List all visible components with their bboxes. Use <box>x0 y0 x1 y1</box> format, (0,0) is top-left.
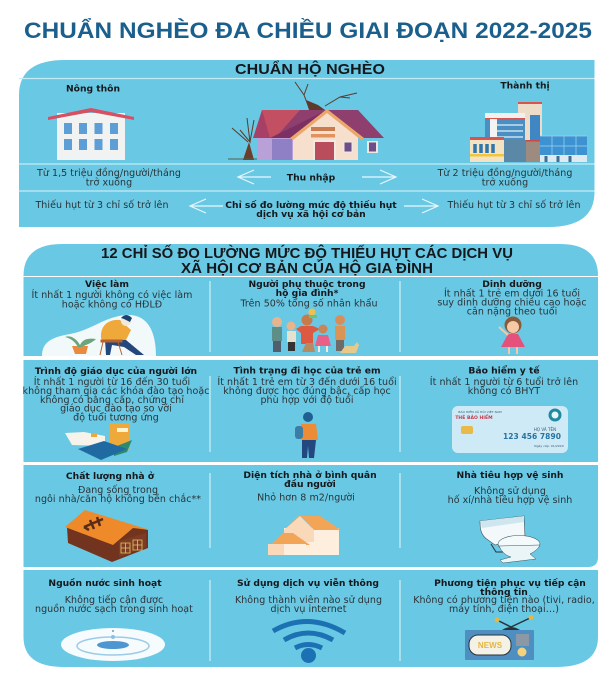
rural heading: Nông thôn <box>66 84 120 94</box>
indicator: child schooling: không được học đúng bậc, cấp học <box>223 386 391 397</box>
indicator: adult education: không có bằng cấp, chứng chỉ <box>40 395 184 406</box>
indicator: dependants: Trên 50% tổng số nhân khẩu <box>239 298 378 310</box>
icon: books and cap <box>65 423 132 460</box>
indicator: water source: Nguồn nước sinh hoạt <box>48 578 162 589</box>
indicator: information access: Không có phương tiện nào (tivi, radio, <box>413 595 595 606</box>
deprivation row: Thiếu hụt từ 3 chỉ số trở lên <box>446 200 581 211</box>
indicator: housing area: Nhỏ hơn 8 m2/người <box>257 492 355 504</box>
indicator: housing quality: Đang sống trong <box>78 485 158 496</box>
income row: trở xuống <box>86 178 132 188</box>
indicator: housing quality: Chất lượng nhà ở <box>66 471 155 482</box>
deprivation row: Chỉ số đo lường mức độ thiếu hụt <box>225 200 397 211</box>
income row <box>36 168 572 188</box>
income row: Từ 1,5 triệu đồng/người/tháng <box>36 168 181 179</box>
arrow: deprivation left <box>190 199 223 213</box>
panel heading: CHUẨN HỘ NGHÈO <box>235 60 385 78</box>
arrow: income right <box>362 170 396 184</box>
deprivation row: Thiếu hụt từ 3 chỉ số trở lên <box>34 200 169 211</box>
indicator: employment <box>32 279 192 356</box>
indicator: employment: Việc làm <box>85 279 129 290</box>
panel: row 1 <box>24 277 598 356</box>
indicator: sanitation: Nhà tiêu hợp vệ sinh <box>457 470 563 481</box>
panel: row 4 <box>24 570 598 667</box>
indicator: dependants: Người phụ thuộc trong <box>248 279 366 290</box>
indicator: telecom <box>235 578 382 663</box>
indicator: health insurance <box>430 364 578 453</box>
indicator: child schooling: Ít nhất 1 trẻ em từ 3 đến dưới 16 tuổi <box>217 376 397 388</box>
title: CHUẨN NGHÈO ĐA CHIỀU GIAI ĐOẠN 2022-2025 <box>24 18 592 43</box>
urban heading: Thành thị <box>500 80 550 92</box>
income row: trở xuống <box>482 178 528 188</box>
panel: 12 indicators heading <box>24 244 598 277</box>
indicator: nutrition: Ít nhất 1 trẻ em dưới 16 tuổi <box>444 288 580 300</box>
indicator: information access: thông tin <box>480 587 528 598</box>
indicator: child schooling: Tình trạng đi học của trẻ em <box>233 366 381 376</box>
icon: girl <box>499 316 525 354</box>
icon: city buildings <box>470 102 587 162</box>
indicator: employment: Ít nhất 1 người không có việc làm <box>32 289 192 301</box>
icon: television: NEWS <box>478 641 503 650</box>
icon: worried man <box>42 315 156 356</box>
indicator: nutrition: cân nặng theo tuổi <box>467 306 557 318</box>
indicator: adult education: không tham gia các khóa đào tạo hoặc <box>23 386 209 397</box>
icon: broken house <box>65 510 150 562</box>
indicator: housing area: Diện tích nhà ở bình quân <box>243 470 377 481</box>
indicator: telecom: Sử dụng dịch vụ viễn thông <box>237 578 379 589</box>
icon: rural building <box>48 108 134 160</box>
arrow: income left <box>238 170 271 184</box>
deprivation row: dịch vụ xã hội cơ bản <box>256 209 366 220</box>
indicator: health insurance: Ít nhất 1 người từ 6 tuổi trở lên <box>430 376 578 388</box>
indicator: nutrition <box>437 279 587 354</box>
icon: damaged house <box>228 82 384 160</box>
panel: poverty standard <box>19 60 594 227</box>
icon: student <box>295 412 318 458</box>
icon: two houses <box>268 516 341 555</box>
indicator: child schooling: phù hợp với độ tuổi <box>260 395 354 406</box>
icon: insurance card: HỌ VÀ TÊN <box>534 427 556 432</box>
indicator: housing quality <box>35 471 201 562</box>
indicator: nutrition: suy dinh dưỡng chiều cao hoặc <box>437 298 587 308</box>
indicator: housing quality: ngôi nhà/căn hộ không bền chắc** <box>35 494 201 505</box>
indicator: water source <box>35 578 193 661</box>
indicator: water source: Không tiếp cận được <box>65 595 163 606</box>
indicator: telecom: dịch vụ internet <box>271 604 347 615</box>
panel: 12 indicators heading: 12 CHỈ SỐ ĐO LƯỜNG MỨC ĐỘ THIẾU HỤT CÁC DỊCH VỤ <box>101 244 513 262</box>
indicator: child schooling <box>217 366 397 458</box>
panel: row 2 <box>23 360 598 462</box>
indicator: employment: hoặc không có HĐLĐ <box>62 300 162 310</box>
indicator: adult education: Ít nhất 1 người từ 16 đến 30 tuổi <box>34 376 190 388</box>
indicator: adult education: độ tuổi tương ứng <box>73 412 159 424</box>
indicator: housing area <box>243 470 377 555</box>
indicator: health insurance: không có BHYT <box>468 386 540 397</box>
icon: insurance card: 123 456 7890 <box>503 432 561 441</box>
icon: toilet <box>480 516 540 563</box>
icon: water drop ripple <box>61 628 165 661</box>
indicator: water source: nguồn nước sạch trong sinh hoạt <box>35 604 193 615</box>
indicator: telecom: Không thành viên nào sử dụng <box>235 595 382 606</box>
indicator: information access <box>413 578 595 660</box>
deprivation row <box>34 199 581 220</box>
indicator: sanitation: hố xí/nhà tiêu hợp vệ sinh <box>448 495 572 506</box>
indicator: information access: máy tính, điện thoại…) <box>449 604 559 615</box>
indicator: adult education <box>23 366 209 460</box>
indicator: housing area: đầu người <box>284 479 336 490</box>
arrow: deprivation right <box>404 199 438 213</box>
indicator: health insurance: Bảo hiểm y tế <box>468 364 540 376</box>
indicator: adult education: Trình độ giáo dục của người lớn <box>35 366 197 377</box>
income row: Từ 2 triệu đồng/người/tháng <box>437 168 572 179</box>
panel: row 3 <box>24 465 598 567</box>
indicator: nutrition: Dinh dưỡng <box>482 279 542 290</box>
icon: insurance card <box>452 406 568 453</box>
indicator: dependants: hộ gia đình* <box>276 288 339 299</box>
indicator: information access: Phương tiện phục vụ tiếp cận <box>434 578 586 589</box>
icon: family <box>272 308 359 353</box>
icon: television <box>465 615 534 660</box>
icon: insurance card: THẺ BẢO HIỂM <box>455 413 493 421</box>
panel: 12 indicators heading: XÃ HỘI CƠ BẢN CỦA HỘ GIA ĐÌNH <box>181 259 433 277</box>
icon: wifi <box>273 621 345 663</box>
indicator: dependants <box>239 279 378 353</box>
indicator: sanitation <box>448 470 572 563</box>
income row: Thu nhập <box>287 172 336 184</box>
indicator: adult education: giáo dục đào tạo so với <box>60 404 172 414</box>
indicator: sanitation: Không sử dụng <box>474 486 546 497</box>
icon: insurance card: BẢO HIỂM XÃ HỘI VIỆT NAM <box>458 409 502 414</box>
icon: insurance card: Ngày cấp: 01/2020 <box>534 444 564 448</box>
